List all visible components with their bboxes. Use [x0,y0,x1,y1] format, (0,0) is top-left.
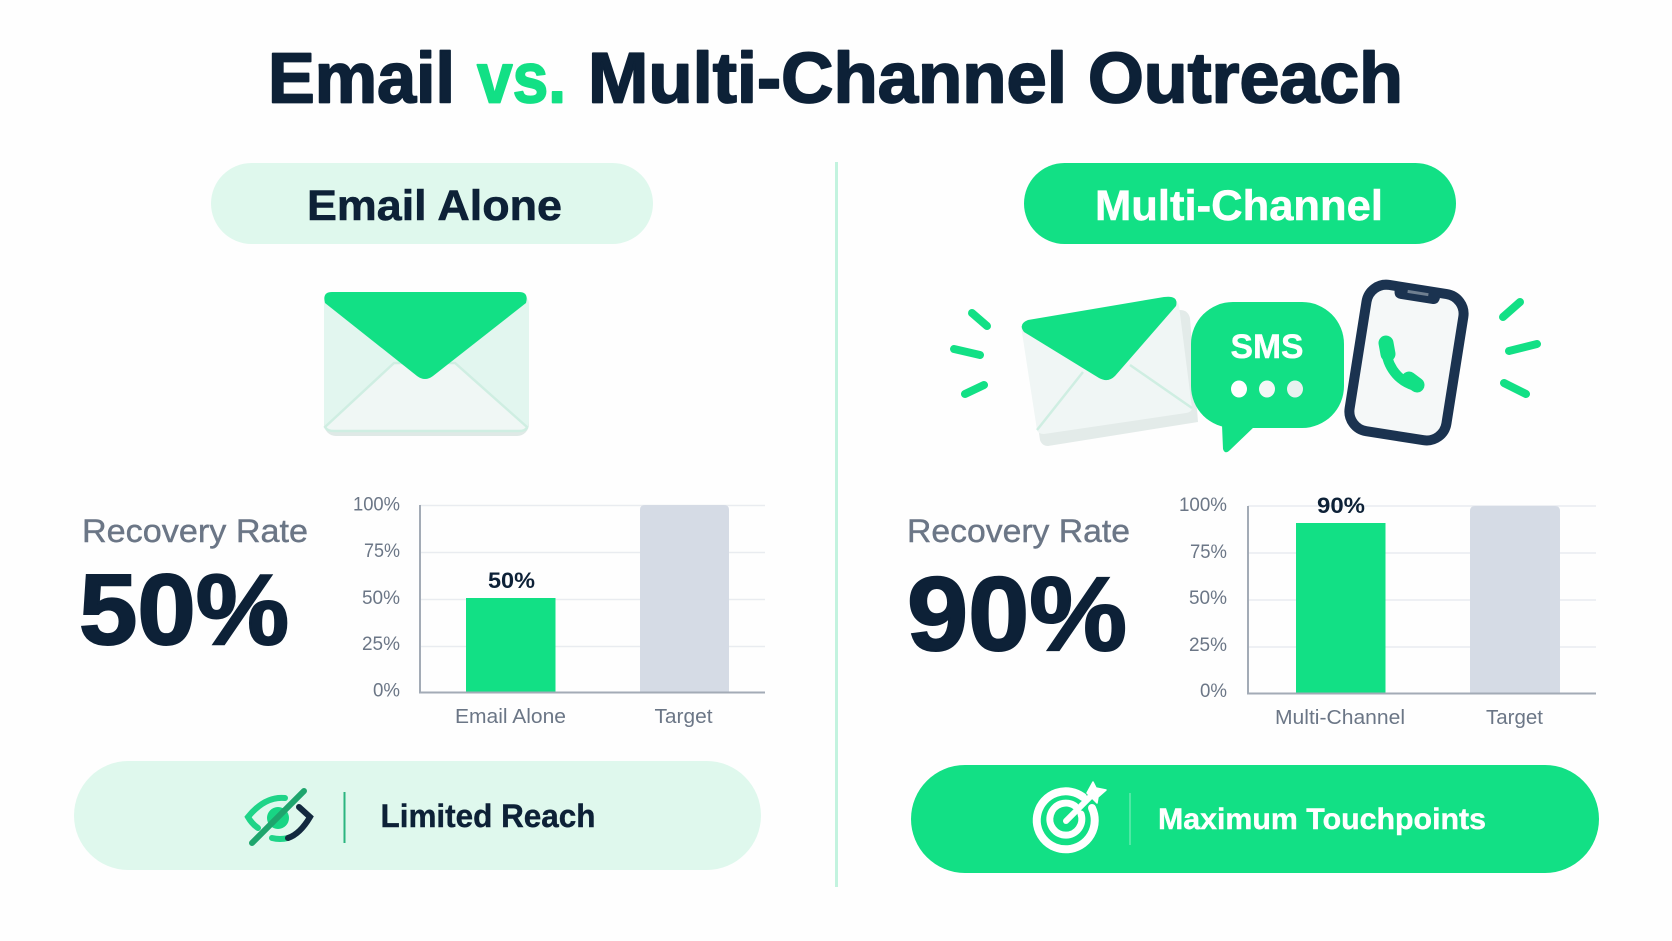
center divider [835,162,838,887]
callout: limited reach [74,761,761,870]
bar chart: email alone: Email Alone [455,706,566,728]
bar chart: email alone: Target [654,706,713,728]
callout: maximum touchpoints [911,765,1599,873]
bar chart: email alone: 50% [362,588,400,609]
icon: crossed-out eye [248,791,310,843]
bar chart: email alone: 0% [373,680,400,702]
title: Multi-Channel [588,40,1067,118]
heading pill: email alone [211,163,653,244]
bar chart: multi-channel: 0% [1200,681,1227,702]
title: vs. [477,40,566,118]
stat: 90%: 90% [907,556,1127,673]
callout divider [1129,793,1131,845]
icon: tilted envelope [1021,297,1198,446]
title: Email [268,40,455,118]
bar chart: multi-channel: 90% [1317,493,1365,518]
bar chart: multi-channel: Target [1486,707,1543,729]
heading pill: email alone: Email Alone [307,182,562,230]
bar chart: multi-channel: 100% [1179,495,1227,516]
callout: limited reach: Limited Reach [380,798,596,834]
bar chart: email alone: 75% [364,541,400,562]
bar chart: email alone [353,494,765,728]
icon: phone [1347,279,1467,443]
heading pill: multi-channel [1024,163,1456,244]
bar chart: email alone: 50% [488,568,535,593]
panel: email alone [74,163,765,870]
icon: sms bubble [1191,302,1344,452]
bar chart: multi-channel [1179,493,1596,729]
bar chart: email alone: 100% [353,494,400,516]
callout divider [344,792,346,843]
bar chart: multi-channel: Multi-Channel [1275,707,1405,729]
callout: maximum touchpoints: Maximum Touchpoints [1158,803,1486,836]
icon: envelope [324,292,529,436]
stat: 50%: 50% [79,554,289,666]
text: recovery rate: Recovery Rate [82,513,308,549]
title: Outreach [1088,40,1403,118]
text: recovery rate: Recovery Rate [907,513,1130,549]
bar chart: multi-channel: 25% [1189,635,1227,656]
bar chart: multi-channel: 75% [1190,542,1227,563]
icon: handset [1386,343,1417,386]
title [268,40,1403,118]
panel: multi-channel [907,163,1599,873]
icon: sms bubble: SMS [1230,328,1304,366]
icon: signal rays [954,302,1537,394]
icon: target with arrow [1037,782,1106,849]
bar chart: multi-channel: 50% [1189,588,1227,609]
heading pill: multi-channel: Multi-Channel [1095,182,1383,230]
bar chart: email alone: 25% [362,634,400,655]
icon group: email, sms, phone [954,279,1537,452]
